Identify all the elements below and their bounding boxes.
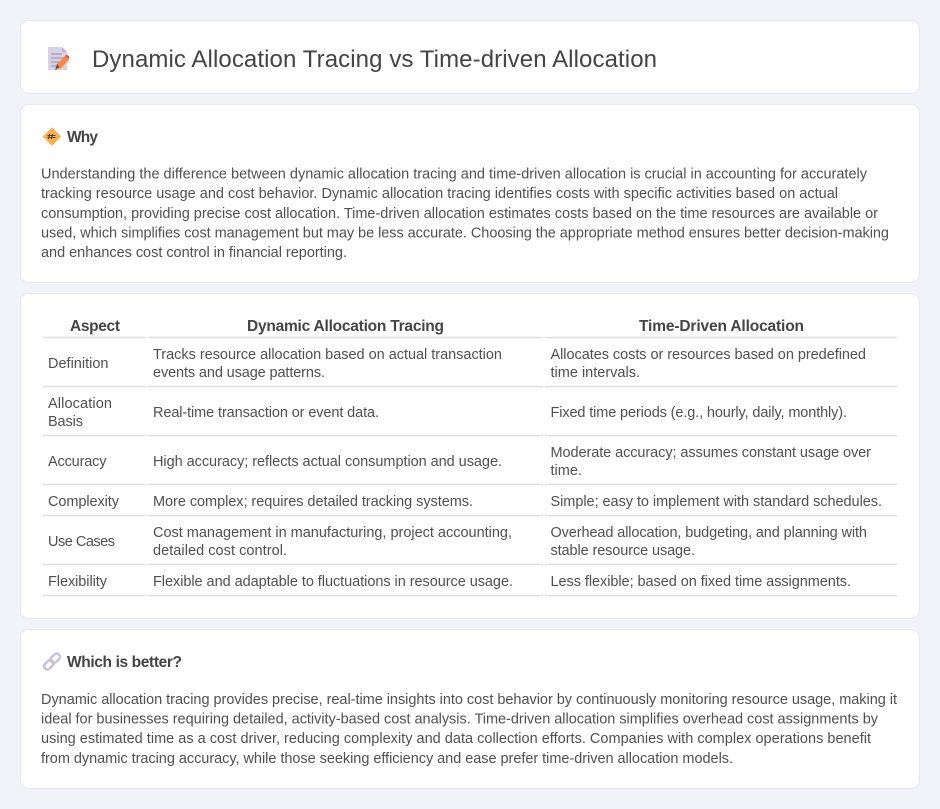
icon: warning diamond xyxy=(44,128,60,145)
table row: accuracy xyxy=(48,445,871,479)
table row: allocation basis: Allocation xyxy=(48,396,112,412)
text block: why paragraph: consumption, providing precise cost allocation. Time-driven allocation estimates costs based on the time resources are available or xyxy=(41,206,878,222)
table row: allocation basis: Fixed time periods (e.g., hourly, daily, monthly). xyxy=(550,405,847,421)
table row: accuracy: High accuracy; reflects actual consumption and usage. xyxy=(153,454,502,470)
table row: accuracy: Moderate accuracy; assumes constant usage over xyxy=(550,445,871,461)
text block: why paragraph: Understanding the difference between dynamic allocation tracing and time-driven allocation is crucial in accounting for accurately xyxy=(41,167,868,183)
table header row: Aspect xyxy=(70,318,120,335)
text block: why paragraph: used, which simplifies cost management but may be less accurate. Choosing the appropriate method ensures better decision-making xyxy=(41,225,889,241)
table row: definition: time intervals. xyxy=(550,365,640,381)
text block: why paragraph: tracking resource usage and cost behavior. Dynamic allocation tracing identifies costs with specific activities based on actual xyxy=(41,186,838,202)
text block: why paragraph: and enhances cost control in financial reporting. xyxy=(41,245,347,261)
table row: flexibility: Less flexible; based on fixed time assignments. xyxy=(550,574,851,590)
table row: definition xyxy=(48,347,866,381)
table row: use cases: stable resource usage. xyxy=(550,543,695,559)
heading: why: Why xyxy=(67,129,98,146)
table row: accuracy: Accuracy xyxy=(48,454,107,470)
table row: use cases: Use Cases xyxy=(48,534,115,550)
heading: which is better: Which is better? xyxy=(67,654,182,671)
text block: which is better paragraph xyxy=(41,692,897,767)
table header row: Dynamic Allocation Tracing xyxy=(247,318,444,335)
panel: why xyxy=(20,104,920,282)
text block: why paragraph xyxy=(41,167,889,261)
table row: flexibility: Flexible and adaptable to fluctuations in resource usage. xyxy=(153,574,513,590)
table row: use cases xyxy=(48,525,867,559)
table row: flexibility xyxy=(48,574,851,590)
icon: chain link xyxy=(43,652,61,671)
table row: definition: Tracks resource allocation based on actual transaction xyxy=(153,347,502,363)
text block: which is better paragraph: using estimated time as a cost driver, reducing complexity and data collection efforts. Companies with complex operations benefit xyxy=(41,731,871,747)
text block: which is better paragraph: ideal for businesses requiring detailed, activity-based cost analysis. Time-driven allocation simplifies overhead cost assignments by xyxy=(41,712,879,728)
table row: allocation basis xyxy=(48,396,847,430)
table row: complexity: Complexity xyxy=(48,494,120,510)
table header row: Time-Driven Allocation xyxy=(639,318,804,335)
table row: allocation basis: Basis xyxy=(48,414,83,430)
table row: accuracy: time. xyxy=(550,463,582,479)
table row: definition: Definition xyxy=(48,356,108,372)
title: Dynamic Allocation Tracing vs Time-driven Allocation xyxy=(92,46,657,73)
panel: title header xyxy=(20,20,920,94)
panel: comparison table xyxy=(20,294,920,618)
table row: use cases: detailed cost control. xyxy=(153,543,287,559)
table row: definition: events and usage patterns. xyxy=(153,365,325,381)
text block: which is better paragraph: from dynamic tracing accuracy, while those seeking efficiency and ease prefer time-driven allocation models. xyxy=(41,751,733,767)
table row: complexity xyxy=(48,494,882,510)
table row: allocation basis: Real-time transaction or event data. xyxy=(153,405,379,421)
icon: document with pencil xyxy=(48,47,70,70)
text block: which is better paragraph: Dynamic allocation tracing provides precise, real-time insights into cost behavior by continuously monitoring resource usage, making it xyxy=(41,692,897,708)
table row: flexibility: Flexibility xyxy=(48,574,108,590)
table row: use cases: Overhead allocation, budgeting, and planning with xyxy=(550,525,867,541)
table header row xyxy=(70,318,804,335)
table row: definition: Allocates costs or resources based on predefined xyxy=(550,347,866,363)
table row: complexity: Simple; easy to implement with standard schedules. xyxy=(550,494,882,510)
panel: which is better xyxy=(20,630,920,788)
table row: use cases: Cost management in manufacturing, project accounting, xyxy=(153,525,512,541)
table row: complexity: More complex; requires detailed tracking systems. xyxy=(153,494,473,510)
